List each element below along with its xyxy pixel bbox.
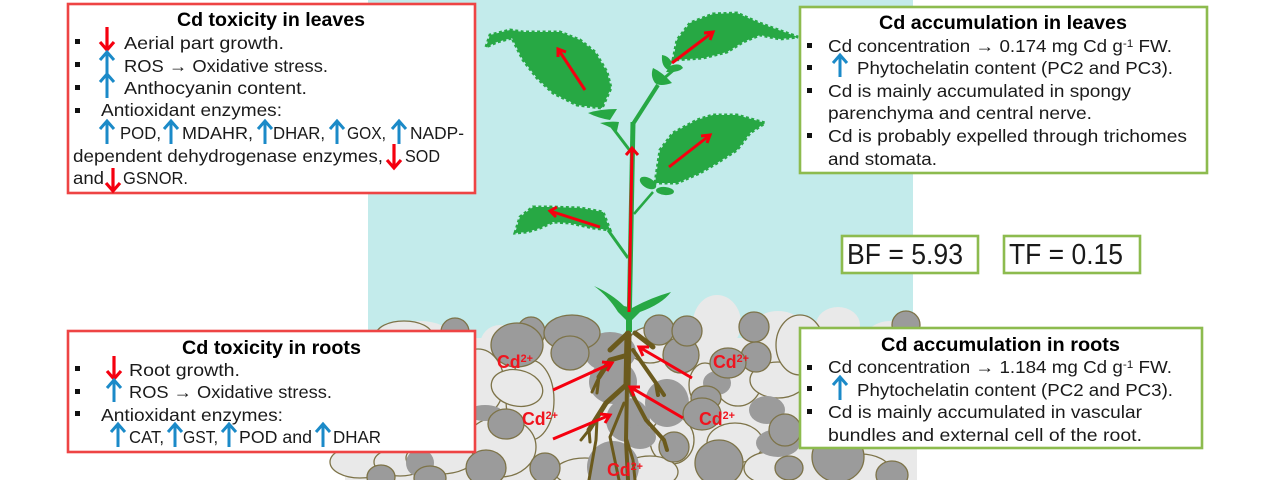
heading: Cd toxicity in roots [182,338,361,359]
leaf: upper left [486,30,611,108]
text: CAT: CAT, [129,427,164,447]
Cd2+ labels: 2+ [546,410,558,422]
text: central nerve: parenchyma and central nerve. [828,103,1092,123]
panel: Cd toxicity in leaves [68,4,475,193]
heading: Cd toxicity in leaves [177,10,365,31]
text: anthocyanin: Anthocyanin content. [124,78,307,98]
text: concentration: -1 [1123,38,1133,50]
text: GSNOR: GSNOR. [123,168,188,188]
Cd transport arrow up the stem [626,148,638,312]
leaf: lower left [515,207,610,233]
text: GST: GST, [183,427,218,447]
icon: up arrow, POD [100,121,114,144]
icon: up arrow, CAT [111,424,125,447]
panel: Cd accumulation in leaves [800,7,1207,173]
text: ROS: ROS → Oxidative stress. [124,56,328,76]
Cd2+ labels: Cd [713,352,737,372]
icon: up arrow, GST [168,424,182,447]
icon: down arrow, root growth [107,356,121,379]
icon: up arrow, anthocyanin [100,74,114,98]
icon: up arrow, ROS [107,380,121,402]
arrows in leaves [550,32,713,227]
text: concentration: -1 [1123,359,1133,371]
text: antioxidant enzymes: Antioxidant enzymes: [101,100,282,120]
Cd2+ labels: 2+ [521,353,533,365]
text: GOX: GOX, [347,123,386,143]
bullets [75,39,80,113]
text: DHAR: DHAR [333,427,381,447]
panel: Cd toxicity in roots [68,331,475,452]
icon: up arrow, ROS [100,52,114,75]
leaf: upper right [673,13,798,60]
water/air background panel [368,0,913,340]
text: antioxidant enzymes: Antioxidant enzymes: [101,405,283,425]
callout: TF value: TF = 0.15 [1009,239,1123,271]
text: phytochelatin: Phytochelatin content (PC2 and PC3). [857,380,1173,400]
icon: down arrow, growth [100,27,114,50]
icon: down arrow, SOD [387,144,401,168]
Cd uptake arrows toward roots [553,347,692,439]
icon: up arrow, phytochelatin [833,55,847,77]
text: stomata: and stomata. [828,149,937,169]
text: ROS: ROS → Oxidative stress. [129,382,332,402]
leaf: middle right [655,115,765,183]
Cd2+ labels [497,352,749,480]
text: SOD: SOD [405,146,440,166]
icon: up arrow, POD [222,424,236,447]
plant shoot [486,13,798,332]
heading: Cd accumulation in roots [881,335,1120,356]
text: bundles: bundles and external cell of the root. [828,425,1142,445]
text: concentration: FW. [1133,357,1172,377]
Cd2+ labels: Cd [497,352,521,372]
text: root growth: Root growth. [129,360,240,380]
roots [581,333,667,480]
icon: up arrow, NADP [392,121,406,144]
text: and: and [73,168,104,188]
bullets [807,43,812,138]
text: concentration: Cd concentration → 1.184 mg Cd g [828,357,1102,377]
text: vascular: Cd is mainly accumulated in vascular [828,402,1142,422]
Cd2+ labels: 2+ [723,410,735,422]
Cd2+ labels: 2+ [631,461,643,473]
stems and branches [608,68,676,332]
Cd2+ labels: Cd [607,460,631,480]
soil stones [330,295,920,480]
icon: up arrow, DHAR [258,121,272,144]
icon: up arrow, phytochelatin [833,377,847,400]
text: dehydrogenase enzymes: dependent dehydrogenase enzymes, [73,146,383,166]
text: POD: POD, [120,123,161,143]
text: aerial part growth: Aerial part growth. [124,33,284,53]
text: spongy parenchyma: Cd is mainly accumulated in spongy [828,81,1131,101]
text: POD and: POD and [239,427,312,447]
panel: Cd accumulation in roots [800,328,1202,448]
text: DHAR: DHAR, [273,123,325,143]
text: trichomes: Cd is probably expelled through trichomes [828,126,1187,146]
text: NADP: NADP- [410,123,464,143]
text: concentration: Cd concentration → 0.174 mg Cd g [828,36,1102,56]
sprout at stem base [594,286,671,332]
Cd2+ labels: Cd [699,409,723,429]
Cd2+ labels: 2+ [737,353,749,365]
icon: up arrow, GOX [330,121,344,144]
callout: BF value: BF = 5.93 [847,239,963,271]
heading: Cd accumulation in leaves [879,13,1127,34]
text: concentration: FW. [1133,36,1172,56]
Cd2+ labels: Cd [522,409,546,429]
icon: up arrow, DHAR [316,424,330,447]
icon: up arrow, MDAHR [164,121,178,144]
text: MDAHR: MDAHR, [182,123,253,143]
bullets [807,365,812,414]
bullets [75,366,80,416]
text: phytochelatin: Phytochelatin content (PC2 and PC3). [857,58,1173,78]
stipules [588,55,683,196]
icon: down arrow, GSNOR [106,168,120,191]
